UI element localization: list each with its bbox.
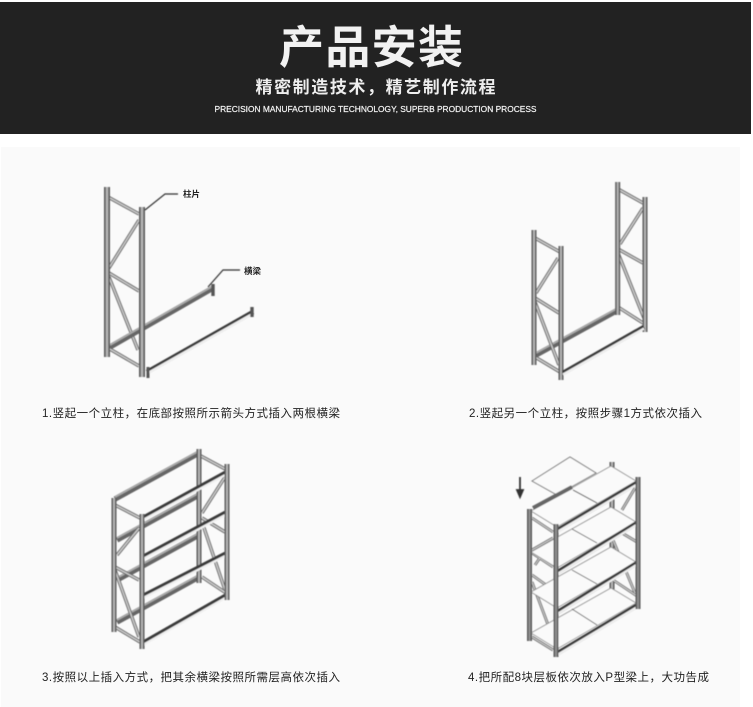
leader: column piece xyxy=(145,194,178,210)
label: column piece: 柱片 xyxy=(183,189,200,199)
step 1 rack diagram xyxy=(107,187,253,378)
step 3 caption: 3.按照以上插入方式，把其余横梁按照所需层高依次插入 xyxy=(42,670,340,684)
leader: beam xyxy=(208,270,240,287)
step 2 caption: 2.竖起另一个立柱，按照步骤1方式依次插入 xyxy=(469,406,702,420)
loose shelf panel xyxy=(532,457,596,495)
content panel xyxy=(1,147,740,707)
icon: down arrow xyxy=(517,477,523,497)
shelf panels xyxy=(531,466,636,649)
title: 产品安装 xyxy=(279,22,463,73)
english subtitle: PRECISION MANUFACTURING TECHNOLOGY, SUPERB PRODUCTION PROCESS xyxy=(214,104,537,114)
step 3 rack diagram xyxy=(114,449,227,649)
header banner xyxy=(0,2,751,134)
step 4 caption: 4.把所配8块层板依次放入P型梁上，大功告成 xyxy=(468,670,710,684)
step 2 rack diagram xyxy=(534,182,645,380)
subtitle: 精密制造技术，精艺制作流程 xyxy=(256,77,496,97)
step 1 caption: 1.竖起一个立柱，在底部按照所示箭头方式插入两根横梁 xyxy=(42,406,340,420)
label: beam: 横梁 xyxy=(244,266,262,276)
step 4 rack diagram xyxy=(517,457,638,657)
